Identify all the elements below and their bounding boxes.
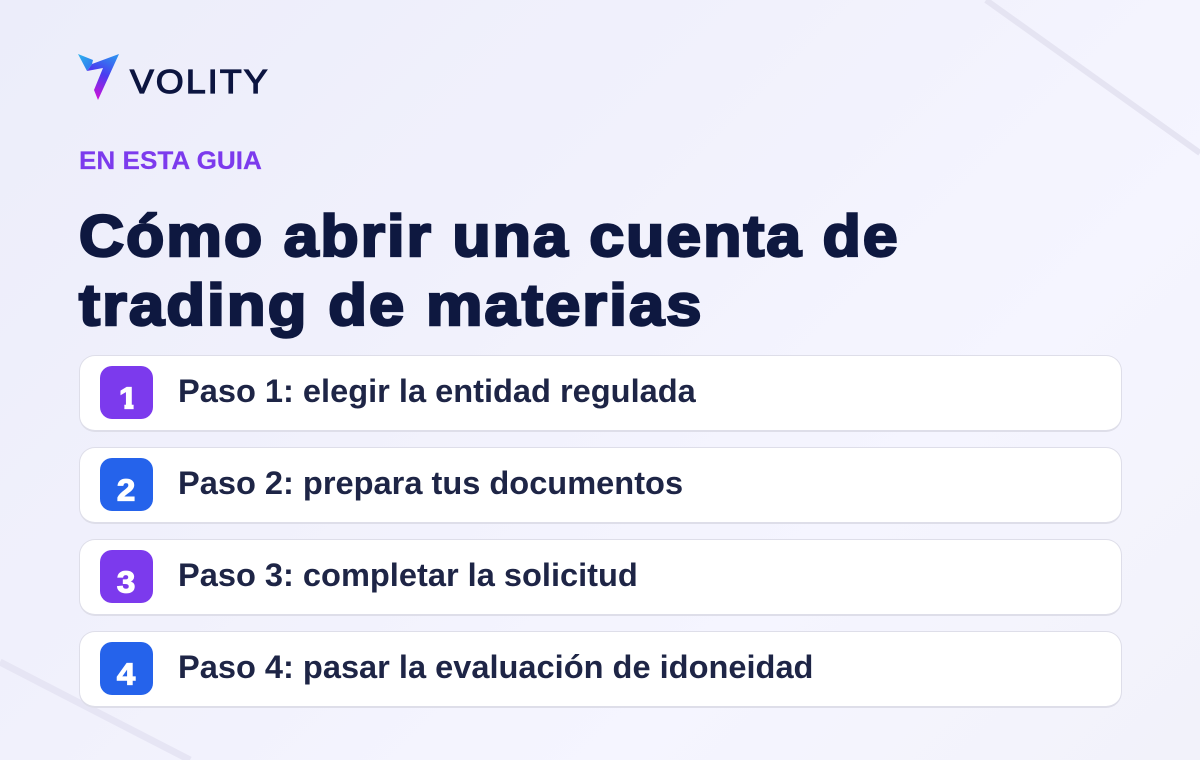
- step card 1: [79, 355, 1122, 432]
- step 1 text: Paso 1: elegir la entidad regulada: [178, 373, 696, 409]
- step card 2: [79, 447, 1122, 524]
- badge 2: [100, 458, 153, 511]
- badge 4: [100, 642, 153, 695]
- badge 1: 1: [119, 382, 138, 416]
- badge 3: [100, 550, 153, 603]
- step 4 text: Paso 4: pasar la evaluación de idoneidad: [178, 649, 813, 685]
- badge 4: 4: [117, 658, 136, 692]
- step 2 text: Paso 2: prepara tus documentos: [178, 465, 683, 501]
- icon: Volity mark: [78, 54, 119, 100]
- badge 3: 3: [117, 566, 136, 600]
- step card 3: [79, 539, 1122, 616]
- step card 4: [79, 631, 1122, 708]
- badge 2: 2: [117, 474, 136, 508]
- logo: Volity: [78, 54, 270, 100]
- title: [78, 204, 900, 339]
- badge 1: [100, 366, 153, 419]
- eyebrow heading: EN ESTA GUIA: [79, 147, 262, 175]
- wordmark: VOLITY: [130, 63, 270, 100]
- title: trading de materias: [79, 273, 704, 338]
- step 3 text: Paso 3: completar la solicitud: [178, 557, 638, 593]
- title: Cómo abrir una cuenta de: [79, 204, 900, 269]
